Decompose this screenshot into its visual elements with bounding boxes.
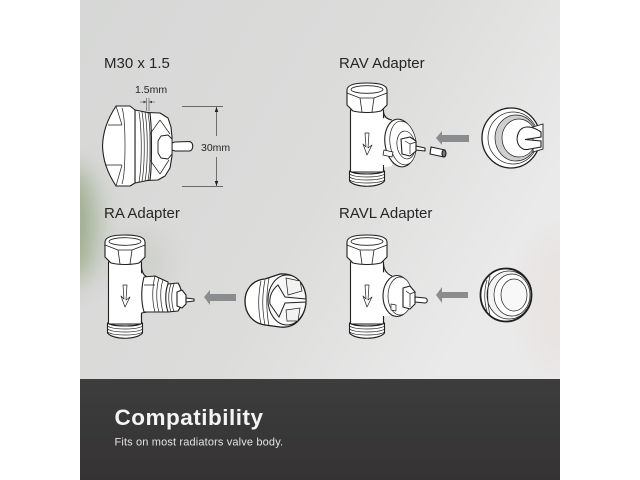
icon: RA adapter [245, 274, 306, 327]
dimension: 1.5mm [135, 84, 167, 111]
heading: Compatibility: Compatibility [114, 405, 264, 430]
dimension: 30mm: 30mm [201, 142, 230, 154]
icon: RA valve with branch [105, 235, 194, 338]
heading: RAV Adapter: RAV Adapter [339, 55, 425, 72]
heading: RA Adapter: RA Adapter [104, 205, 180, 222]
icon: RAV pin sleeve [430, 147, 446, 157]
arrow: RAVL [436, 287, 468, 303]
background [80, 0, 560, 379]
icon: RAV valve with branch [347, 83, 425, 186]
icon: RAVL valve with branch [347, 235, 427, 338]
heading: RAVL Adapter: RAVL Adapter [339, 205, 432, 222]
dimension: 1.5mm: 1.5mm [135, 84, 167, 96]
dimension: 30mm [182, 106, 230, 186]
icon: RAVL adapter [480, 268, 532, 322]
heading: M30 x 1.5: M30 x 1.5 [104, 55, 170, 72]
infographic [80, 0, 560, 480]
text: footer description: Fits on most radiators valve body. [114, 436, 283, 448]
arrow: RA [204, 290, 236, 305]
panel: dark footer [80, 379, 560, 480]
icon: RAV adapter [482, 108, 543, 168]
arrow: RAV [436, 131, 469, 145]
icon: M30 thread connector [102, 106, 193, 186]
